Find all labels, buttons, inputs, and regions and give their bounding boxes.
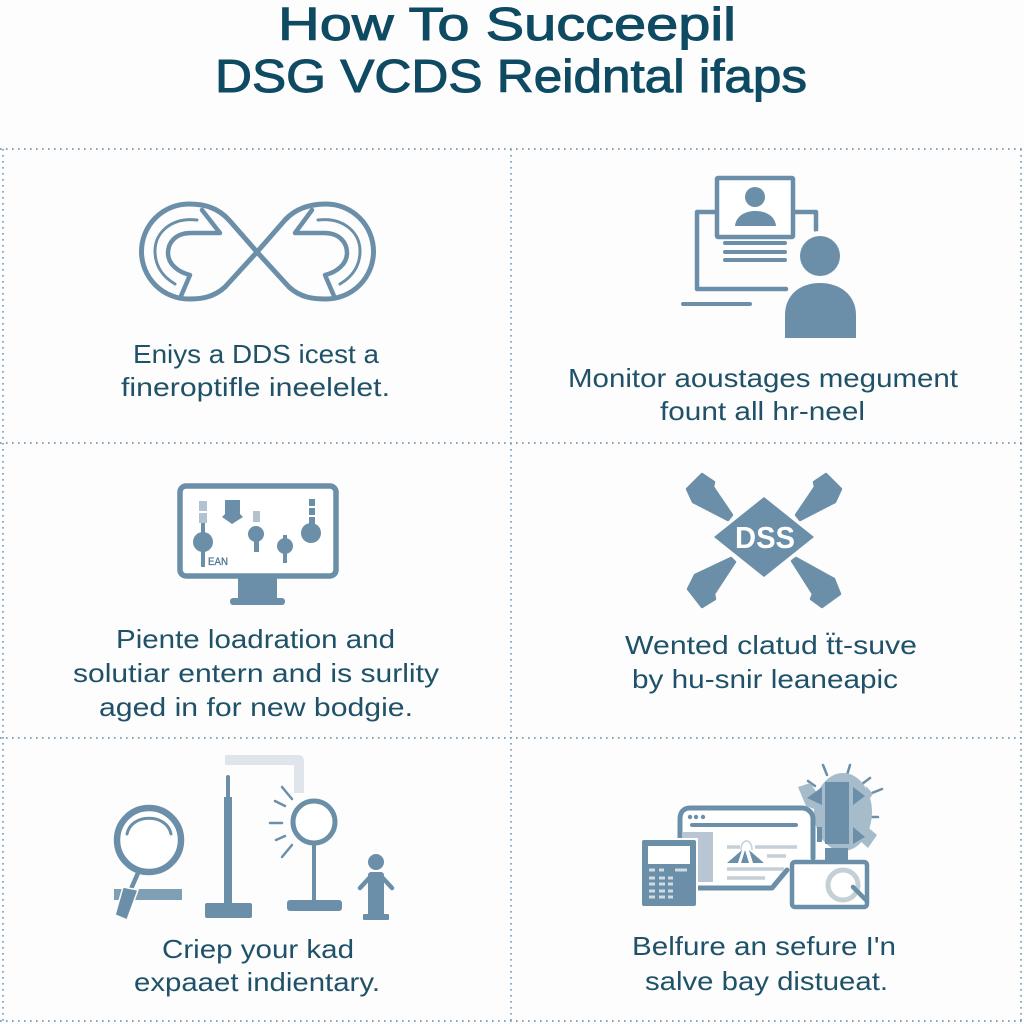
- text block: [632, 931, 896, 996]
- text block: Criep your kad: [162, 934, 354, 964]
- text block: [568, 363, 959, 426]
- panel: devices and bug: [632, 765, 896, 996]
- text block: Piente loadration and: [116, 624, 395, 654]
- text block: [121, 339, 390, 402]
- title: [215, 0, 807, 102]
- panel: monitor user: [568, 178, 959, 426]
- panel: infinity loop: [121, 204, 390, 402]
- icon: lamp with rays: [270, 787, 342, 911]
- icon: browser window: [677, 807, 813, 889]
- text block: [134, 934, 380, 997]
- icon: search box: [792, 862, 867, 907]
- icon: infinity arrows: [142, 204, 374, 299]
- text block: [625, 630, 917, 694]
- icon: DSS diamond with four arms: DSS: [735, 520, 795, 555]
- text block: salve bay distueat.: [645, 966, 888, 996]
- text block: Monitor aoustages megument: [568, 363, 959, 393]
- icon: magnifying glass: [114, 808, 182, 920]
- panel: inspection tools: [114, 760, 392, 997]
- icon: stand with bracket: [205, 760, 299, 918]
- panel: desktop monitor: [73, 486, 439, 722]
- text block: Wented clatud ẗt-suve: [625, 630, 917, 660]
- icon: DSS diamond with four arms: [687, 474, 841, 607]
- panel: DSS diamond: [625, 474, 917, 694]
- text block: aged in for new bodgie.: [99, 692, 413, 722]
- icon: calculator: [640, 838, 698, 908]
- text block: expaaet indientary.: [134, 967, 380, 997]
- icon: bug: [798, 765, 882, 862]
- text block: by hu-snir leaneapic: [632, 664, 898, 694]
- title: DSG VCDS Reidntal ifaps: [215, 50, 807, 102]
- text block: fineroptifle ineelelet.: [121, 372, 390, 402]
- icon: desktop with gauges: [180, 486, 336, 605]
- text block: Belfure an sefure I'n: [632, 931, 896, 961]
- icon: profile on laptop with user: [683, 178, 856, 338]
- text block: fount all hr-neel: [660, 396, 865, 426]
- text block: solutiar entern and is surlity: [73, 658, 439, 688]
- icon: person: [360, 854, 392, 920]
- text block: [73, 624, 439, 722]
- text block: Eniys a DDS icest a: [133, 339, 380, 369]
- icon: desktop with gauges: EAN: [208, 556, 228, 568]
